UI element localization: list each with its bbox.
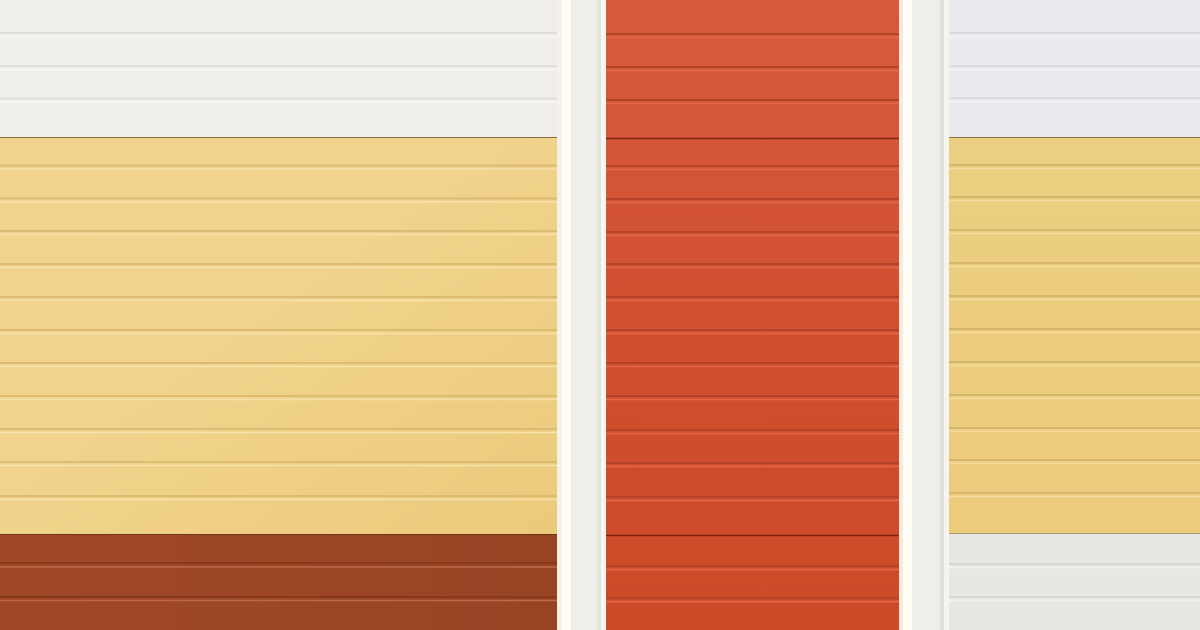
- panel: left yellow cladding: [0, 137, 558, 534]
- panel: left brown cladding: [0, 534, 557, 630]
- panel: right upper white cladding: [949, 0, 1200, 137]
- panel: right lower white cladding: [949, 533, 1200, 630]
- panel: right white frame post: [899, 0, 949, 630]
- panel: left white frame post: [557, 0, 606, 630]
- panel: right yellow cladding: [949, 137, 1200, 533]
- panel: centre red cladding: [606, 0, 899, 630]
- panel: left white cladding: [0, 0, 558, 137]
